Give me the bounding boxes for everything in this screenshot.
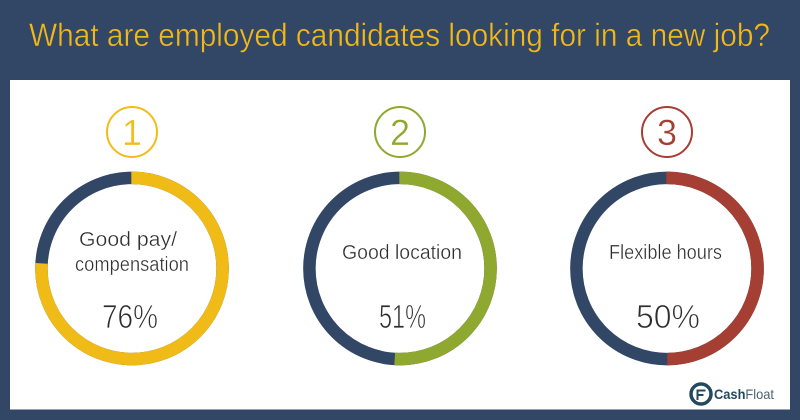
value: 76%: 76%: [102, 298, 158, 335]
donut chart: 51%: [309, 178, 491, 359]
logo wordmark: CashFloat: [714, 386, 774, 402]
badge: number 1: 1: [122, 112, 142, 153]
donut chart: 76%: [41, 178, 223, 359]
panel: item 1 good pay: [41, 107, 223, 359]
label: good pay/compensation: compensation: [75, 254, 189, 276]
badge: number 2: [375, 107, 425, 157]
label: good location: Good location: [342, 242, 462, 264]
panel: white background: [10, 80, 790, 410]
label: flexible hours: Flexible hours: [609, 242, 722, 264]
panel: item 3 flexible hours: [576, 107, 758, 359]
logo: CashFloat: [691, 384, 774, 404]
panel: item 2 good location: [309, 107, 491, 359]
badge: number 1: [107, 107, 157, 157]
donut chart: 50%: [576, 178, 758, 359]
value: 51%: 51%: [379, 298, 426, 335]
icon: CashFloat emblem: [691, 384, 711, 404]
badge: number 2: 2: [390, 112, 410, 153]
label: good pay/compensation: [75, 229, 189, 276]
label: good pay/compensation: Good pay/: [79, 229, 177, 251]
badge: number 3: [642, 107, 692, 157]
value: 50%: 50%: [636, 298, 700, 335]
badge: number 3: 3: [657, 112, 677, 153]
